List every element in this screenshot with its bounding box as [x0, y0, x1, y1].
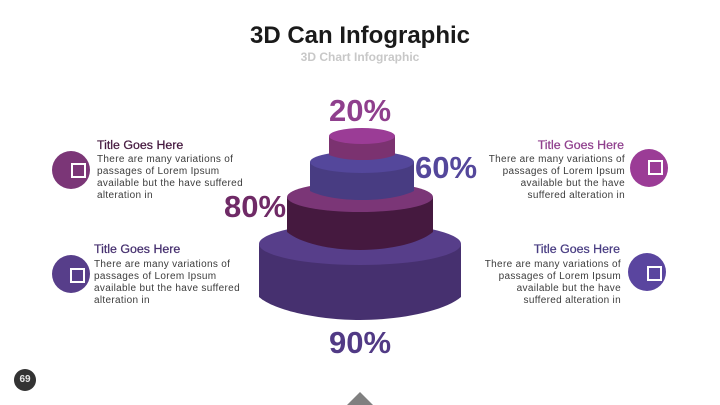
percentage: 20%: 20% — [329, 93, 391, 128]
percentage: 80%: 80% — [224, 189, 286, 224]
icon: bottom navigation triangle — [347, 392, 373, 405]
panel: top right — [488, 138, 668, 201]
text: bottom left: passages of Lorem Ipsum — [94, 271, 216, 282]
tier: 60% — [310, 151, 414, 200]
text: top left: There are many variations of — [97, 154, 233, 165]
tier: 90% base — [259, 223, 461, 320]
page number badge: 69 — [19, 374, 31, 385]
text: top right — [488, 154, 625, 201]
text: top right: suffered alteration in — [528, 190, 625, 201]
subtitle: 3D Chart Infographic — [301, 50, 419, 64]
tier: 80% — [287, 182, 433, 250]
heading: bottom left: Title Goes Here — [94, 242, 180, 256]
percentage: 60%: 60% — [415, 150, 477, 185]
text: bottom right — [484, 259, 621, 306]
panel: bottom left — [52, 242, 240, 306]
text: top right: passages of Lorem Ipsum — [503, 166, 625, 177]
text: bottom left: There are many variations of — [94, 259, 230, 270]
heading: top left: Title Goes Here — [97, 138, 183, 152]
text: top right: available but the have — [521, 178, 625, 189]
heading: bottom right: Title Goes Here — [534, 242, 620, 256]
text: bottom right: available but the have — [517, 283, 621, 294]
text: bottom left: alteration in — [94, 295, 150, 306]
heading: top right: Title Goes Here — [538, 138, 624, 152]
title: 3D Can Infographic — [250, 22, 470, 49]
text: top left: available but the have suffered — [97, 178, 243, 189]
page number badge — [14, 369, 36, 391]
icon: bottom right circle — [628, 253, 666, 291]
percentage: 90%: 90% — [329, 325, 391, 360]
text: bottom left — [94, 259, 240, 306]
tier: 20% top — [329, 128, 395, 160]
panel: bottom right — [484, 242, 666, 306]
text: top left: alteration in — [97, 190, 153, 201]
icon: bottom left circle — [52, 255, 90, 293]
text: bottom right: There are many variations of — [485, 259, 621, 270]
text: top left — [97, 154, 243, 201]
icon: top right circle — [630, 149, 668, 187]
icon: top left circle — [52, 151, 90, 189]
text: top left: passages of Lorem Ipsum — [97, 166, 219, 177]
panel: top left — [52, 138, 243, 201]
text: bottom right: suffered alteration in — [524, 295, 621, 306]
text: top right: There are many variations of — [489, 154, 625, 165]
text: bottom left: available but the have suffered — [94, 283, 240, 294]
text: bottom right: passages of Lorem Ipsum — [499, 271, 621, 282]
